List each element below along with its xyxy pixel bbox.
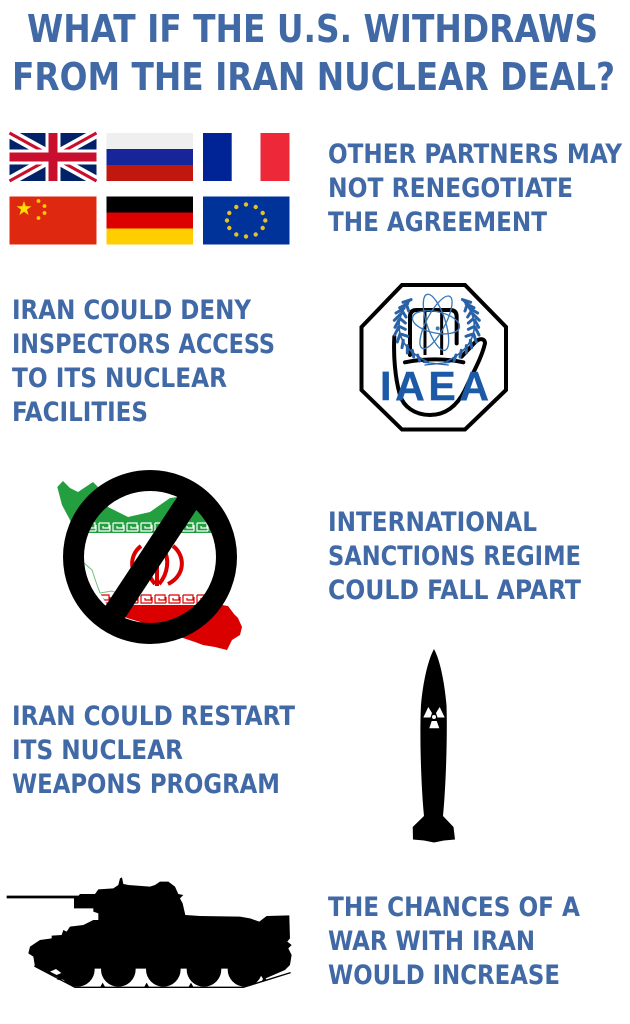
map: flag colours	[57, 481, 242, 650]
title: WHAT IF THE U.S. WITHDRAWS	[27, 7, 598, 52]
icon: tank silhouette	[7, 877, 292, 987]
text: sanctions: SANCTIONS REGIME	[328, 541, 581, 572]
icon: Iran map with prohibition sign	[50, 475, 250, 655]
text: weapons program: ITS NUCLEAR	[12, 735, 183, 766]
panel: partner flags	[10, 133, 290, 244]
text: other partners	[328, 139, 622, 238]
text: chances of war: THE CHANCES OF A	[328, 892, 580, 923]
text: other partners: NOT RENEGOTIATE	[328, 173, 573, 204]
icon: IAEA logo	[362, 285, 506, 430]
icon: EU flag	[203, 196, 290, 244]
icon: UK flag	[10, 133, 96, 181]
icon: nuclear missile	[413, 649, 455, 842]
text: inspectors: IRAN COULD DENY	[12, 295, 251, 326]
text: sanctions: INTERNATIONAL	[328, 507, 537, 538]
text: chances of war	[328, 892, 580, 991]
icon: hand outline	[394, 310, 485, 415]
text: inspectors: FACILITIES	[12, 397, 148, 428]
text: inspectors: INSPECTORS ACCESS	[12, 329, 275, 360]
title	[12, 7, 615, 100]
map: emblem	[132, 546, 182, 586]
icon: laurel wreath	[394, 299, 479, 365]
text: inspectors: TO ITS NUCLEAR	[12, 363, 227, 394]
text: IAEA: IAEA	[380, 363, 489, 409]
prohibition sign	[74, 480, 226, 634]
icon: Russia flag	[106, 133, 193, 181]
text: inspectors	[12, 295, 275, 428]
text: other partners: THE AGREEMENT	[328, 207, 547, 238]
text: other partners: OTHER PARTNERS MAY	[328, 139, 622, 170]
text: sanctions: COULD FALL APART	[328, 575, 581, 606]
text: chances of war: WOULD INCREASE	[328, 960, 560, 991]
text: weapons program	[12, 701, 295, 800]
text: weapons program: IRAN COULD RESTART	[12, 701, 295, 732]
text: sanctions	[328, 507, 581, 606]
icon: France flag	[203, 133, 290, 181]
icon: China flag	[10, 196, 96, 244]
text: weapons program: WEAPONS PROGRAM	[12, 769, 280, 800]
icon: radiation symbol	[423, 707, 445, 728]
icon: atom	[410, 292, 462, 353]
text: chances of war: WAR WITH IRAN	[328, 926, 535, 957]
icon: Germany flag	[106, 196, 193, 244]
